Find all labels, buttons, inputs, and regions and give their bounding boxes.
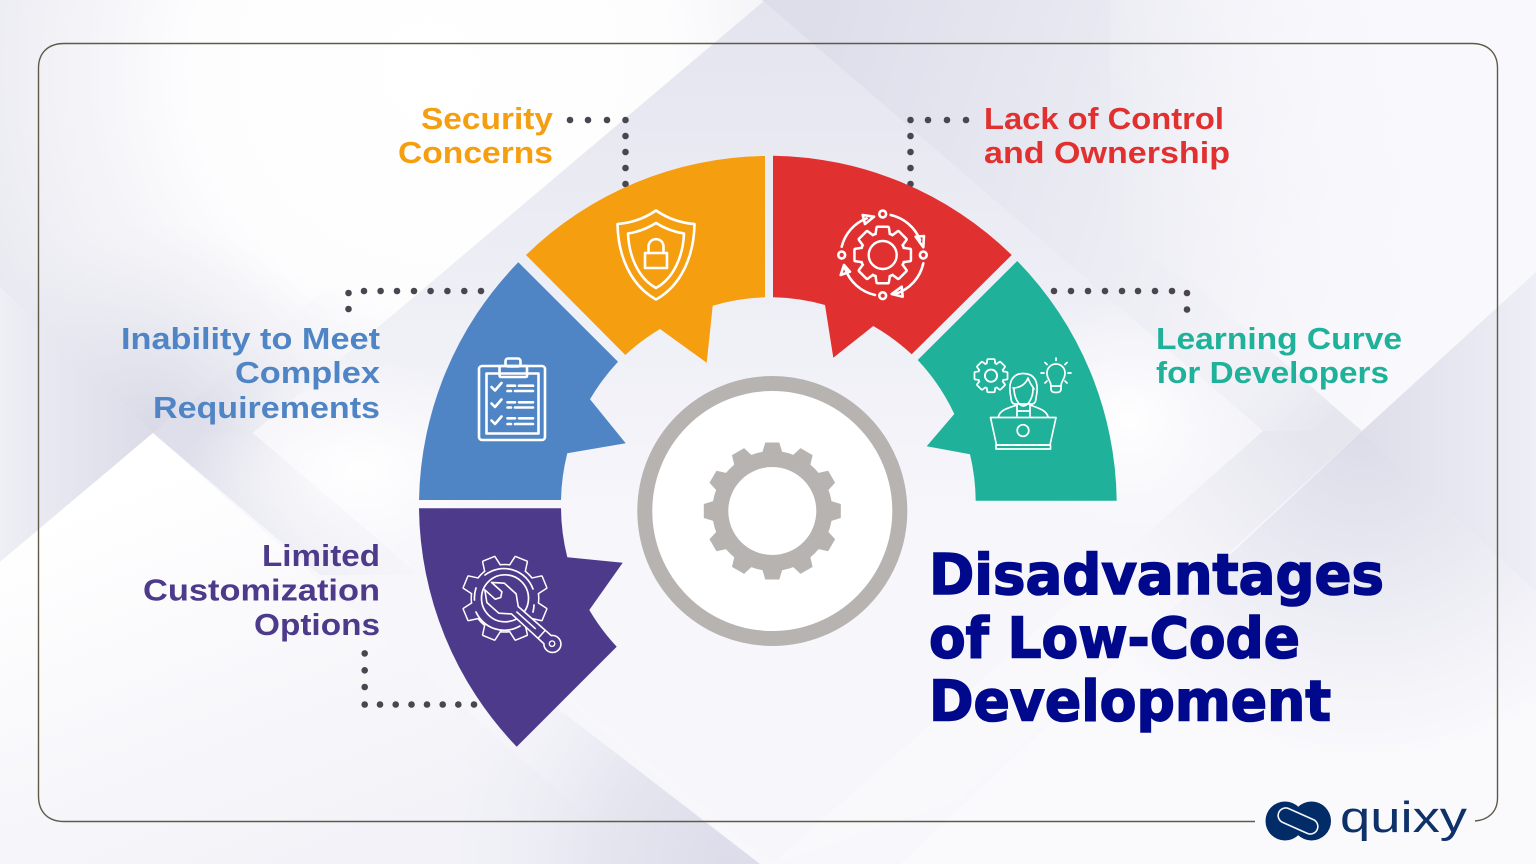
- label: inability to meet complex requirements: Requirements: [153, 390, 380, 425]
- segment: limited customization (purple): [419, 508, 623, 747]
- icon: clipboard checklist: [479, 358, 545, 440]
- connector dots: security concerns: [567, 117, 629, 187]
- label: learning curve for developers: for Developers: [1156, 355, 1389, 390]
- icon: shield with padlock: [618, 210, 694, 300]
- title: of Low-Code: [929, 606, 1300, 671]
- label: inability to meet complex requirements: Complex: [235, 355, 381, 390]
- label: security concerns: [398, 101, 554, 170]
- segment: security concerns (orange): [526, 156, 765, 363]
- label: limited customization options: Options: [254, 607, 380, 642]
- segment: lack of control (red): [773, 156, 1012, 358]
- title: Disadvantages: [929, 543, 1384, 608]
- title: [929, 543, 1384, 735]
- center gear: [704, 442, 841, 580]
- label: limited customization options: Customization: [143, 572, 380, 608]
- label: lack of control and ownership: [984, 101, 1230, 170]
- icon: developer with laptop, gear and bulb: [975, 358, 1071, 449]
- title: Development: [929, 670, 1331, 735]
- logo: quixy: [1266, 793, 1467, 842]
- connector dots: limited customization: [361, 650, 477, 708]
- connector dots: learning curve: [1051, 288, 1190, 313]
- label: inability to meet complex requirements: Inability to Meet: [121, 321, 380, 356]
- connector dots: inability to meet requirements: [345, 288, 484, 312]
- center ring: [645, 384, 900, 638]
- label: lack of control and ownership: Lack of Control: [984, 101, 1224, 136]
- label: learning curve for developers: Learning Curve: [1156, 321, 1402, 356]
- segment: learning curve (green): [918, 261, 1117, 501]
- label: learning curve for developers: [1156, 321, 1402, 390]
- label: inability to meet complex requirements: [121, 321, 381, 425]
- connector dots: lack of control: [907, 117, 969, 187]
- label: limited customization options: Limited: [262, 538, 380, 573]
- label: security concerns: Concerns: [398, 135, 553, 170]
- icon: gear with cycle arrows: [838, 211, 927, 299]
- label: lack of control and ownership: and Ownership: [984, 135, 1230, 170]
- icon: gear with wrench: [463, 556, 567, 659]
- label: limited customization options: [143, 538, 380, 642]
- label: security concerns: Security: [421, 101, 554, 136]
- logo mark: [1266, 802, 1331, 840]
- segment: inability to meet requirements (blue): [419, 262, 626, 500]
- logo wordmark: quixy: [1340, 793, 1467, 842]
